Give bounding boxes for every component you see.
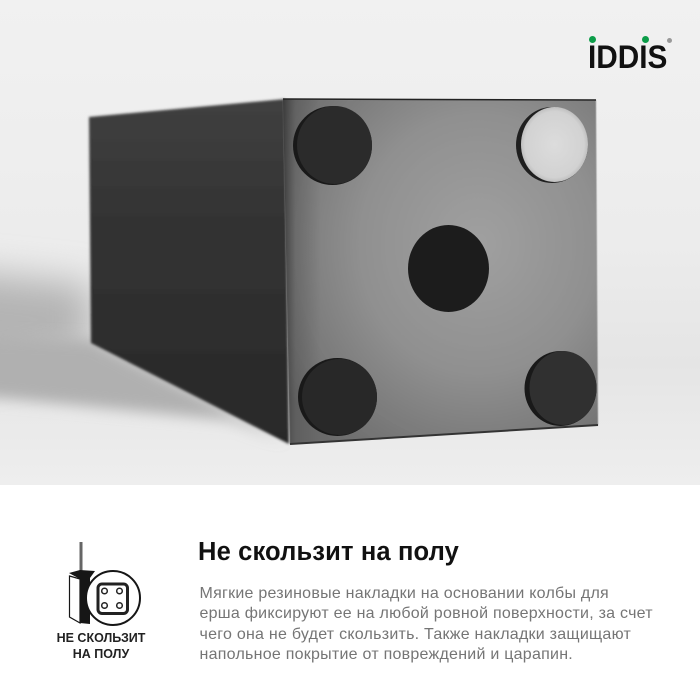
logo dot left — [588, 36, 596, 42]
icon: brush handle — [80, 542, 82, 572]
body text: чего она не будет скользить. Также накладки защищают — [200, 626, 631, 643]
registered mark — [667, 38, 672, 42]
body text — [200, 585, 653, 663]
logo: iddis — [588, 36, 672, 74]
icon caption: НА ПОЛУ — [73, 646, 129, 660]
floor shadow — [0, 270, 285, 440]
rubber pad: top left — [293, 106, 372, 185]
heading: Не скользит на полу — [198, 538, 459, 566]
bottom face — [283, 99, 598, 444]
body text: Мягкие резиновые накладки на основании колбы для — [200, 585, 609, 602]
felt pad: top right — [516, 107, 588, 183]
icon: brush holder with pads — [68, 542, 141, 626]
body text: ерша фиксируют ее на любой ровной поверхности, за счет — [200, 605, 653, 622]
product photo — [0, 0, 700, 485]
icon caption: НЕ СКОЛЬЗИТ — [57, 631, 145, 645]
body text: напольное покрытие от повреждений и царапин. — [200, 646, 573, 663]
side of holder — [89, 99, 289, 444]
rubber pad: bottom right — [524, 351, 596, 426]
logo wordmark: IDDIS — [588, 38, 667, 74]
icon: holder body — [69, 570, 95, 624]
center pad — [408, 225, 489, 312]
rubber pad: bottom left — [298, 358, 377, 436]
icon: circle with base — [86, 571, 140, 625]
logo dot right — [642, 36, 649, 42]
icon caption — [57, 631, 146, 660]
backdrop — [0, 0, 700, 485]
